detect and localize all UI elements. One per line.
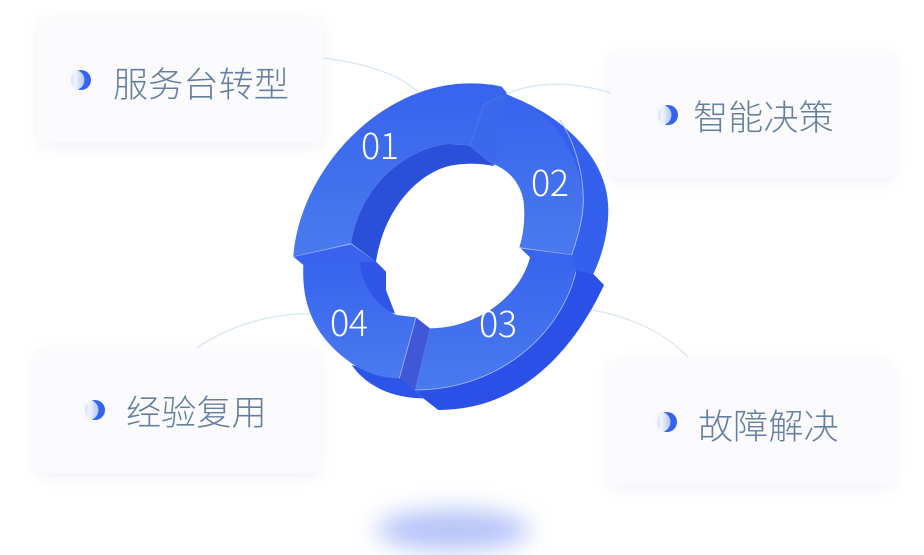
number 01: 01	[361, 118, 399, 170]
segment 04 face	[303, 260, 416, 378]
segment 03 highlight	[415, 272, 576, 390]
segment 03 face	[415, 248, 576, 390]
icon: bullet	[658, 105, 678, 125]
ground shadow	[376, 510, 530, 550]
connector lines	[197, 58, 688, 357]
panel: 故障解决	[609, 359, 893, 485]
segment 01/04 end cap	[293, 244, 376, 265]
segment 03 depth	[413, 270, 604, 410]
ring	[293, 83, 608, 410]
segment 01/02 end cap	[470, 93, 507, 166]
icon: bullet	[71, 70, 91, 90]
segment 04 highlight	[399, 317, 416, 378]
icon: bullet	[657, 412, 677, 432]
icon: bullet	[85, 400, 105, 420]
segment 04 inner wall	[357, 250, 395, 313]
panel: 智能决策	[610, 51, 894, 178]
label: 经验复用	[126, 385, 267, 436]
segment 01 face	[293, 83, 507, 257]
panel: 经验复用	[36, 347, 320, 473]
segment 04 depth	[352, 365, 423, 398]
number 02: 02	[531, 155, 569, 207]
number 03: 03	[479, 296, 517, 348]
number 04: 04	[330, 295, 368, 347]
label: 智能决策	[693, 90, 834, 141]
segment 01 highlight	[293, 244, 351, 257]
segment 02 highlight	[521, 120, 583, 255]
label: 故障解决	[698, 399, 839, 450]
segment 01 inner wall	[351, 144, 494, 262]
segment 03/04 end cap	[399, 317, 430, 390]
panel: 服务台转型	[38, 17, 323, 143]
label: 服务台转型	[113, 57, 289, 108]
segment 02 face	[490, 92, 583, 255]
segment 02 depth	[513, 98, 608, 274]
